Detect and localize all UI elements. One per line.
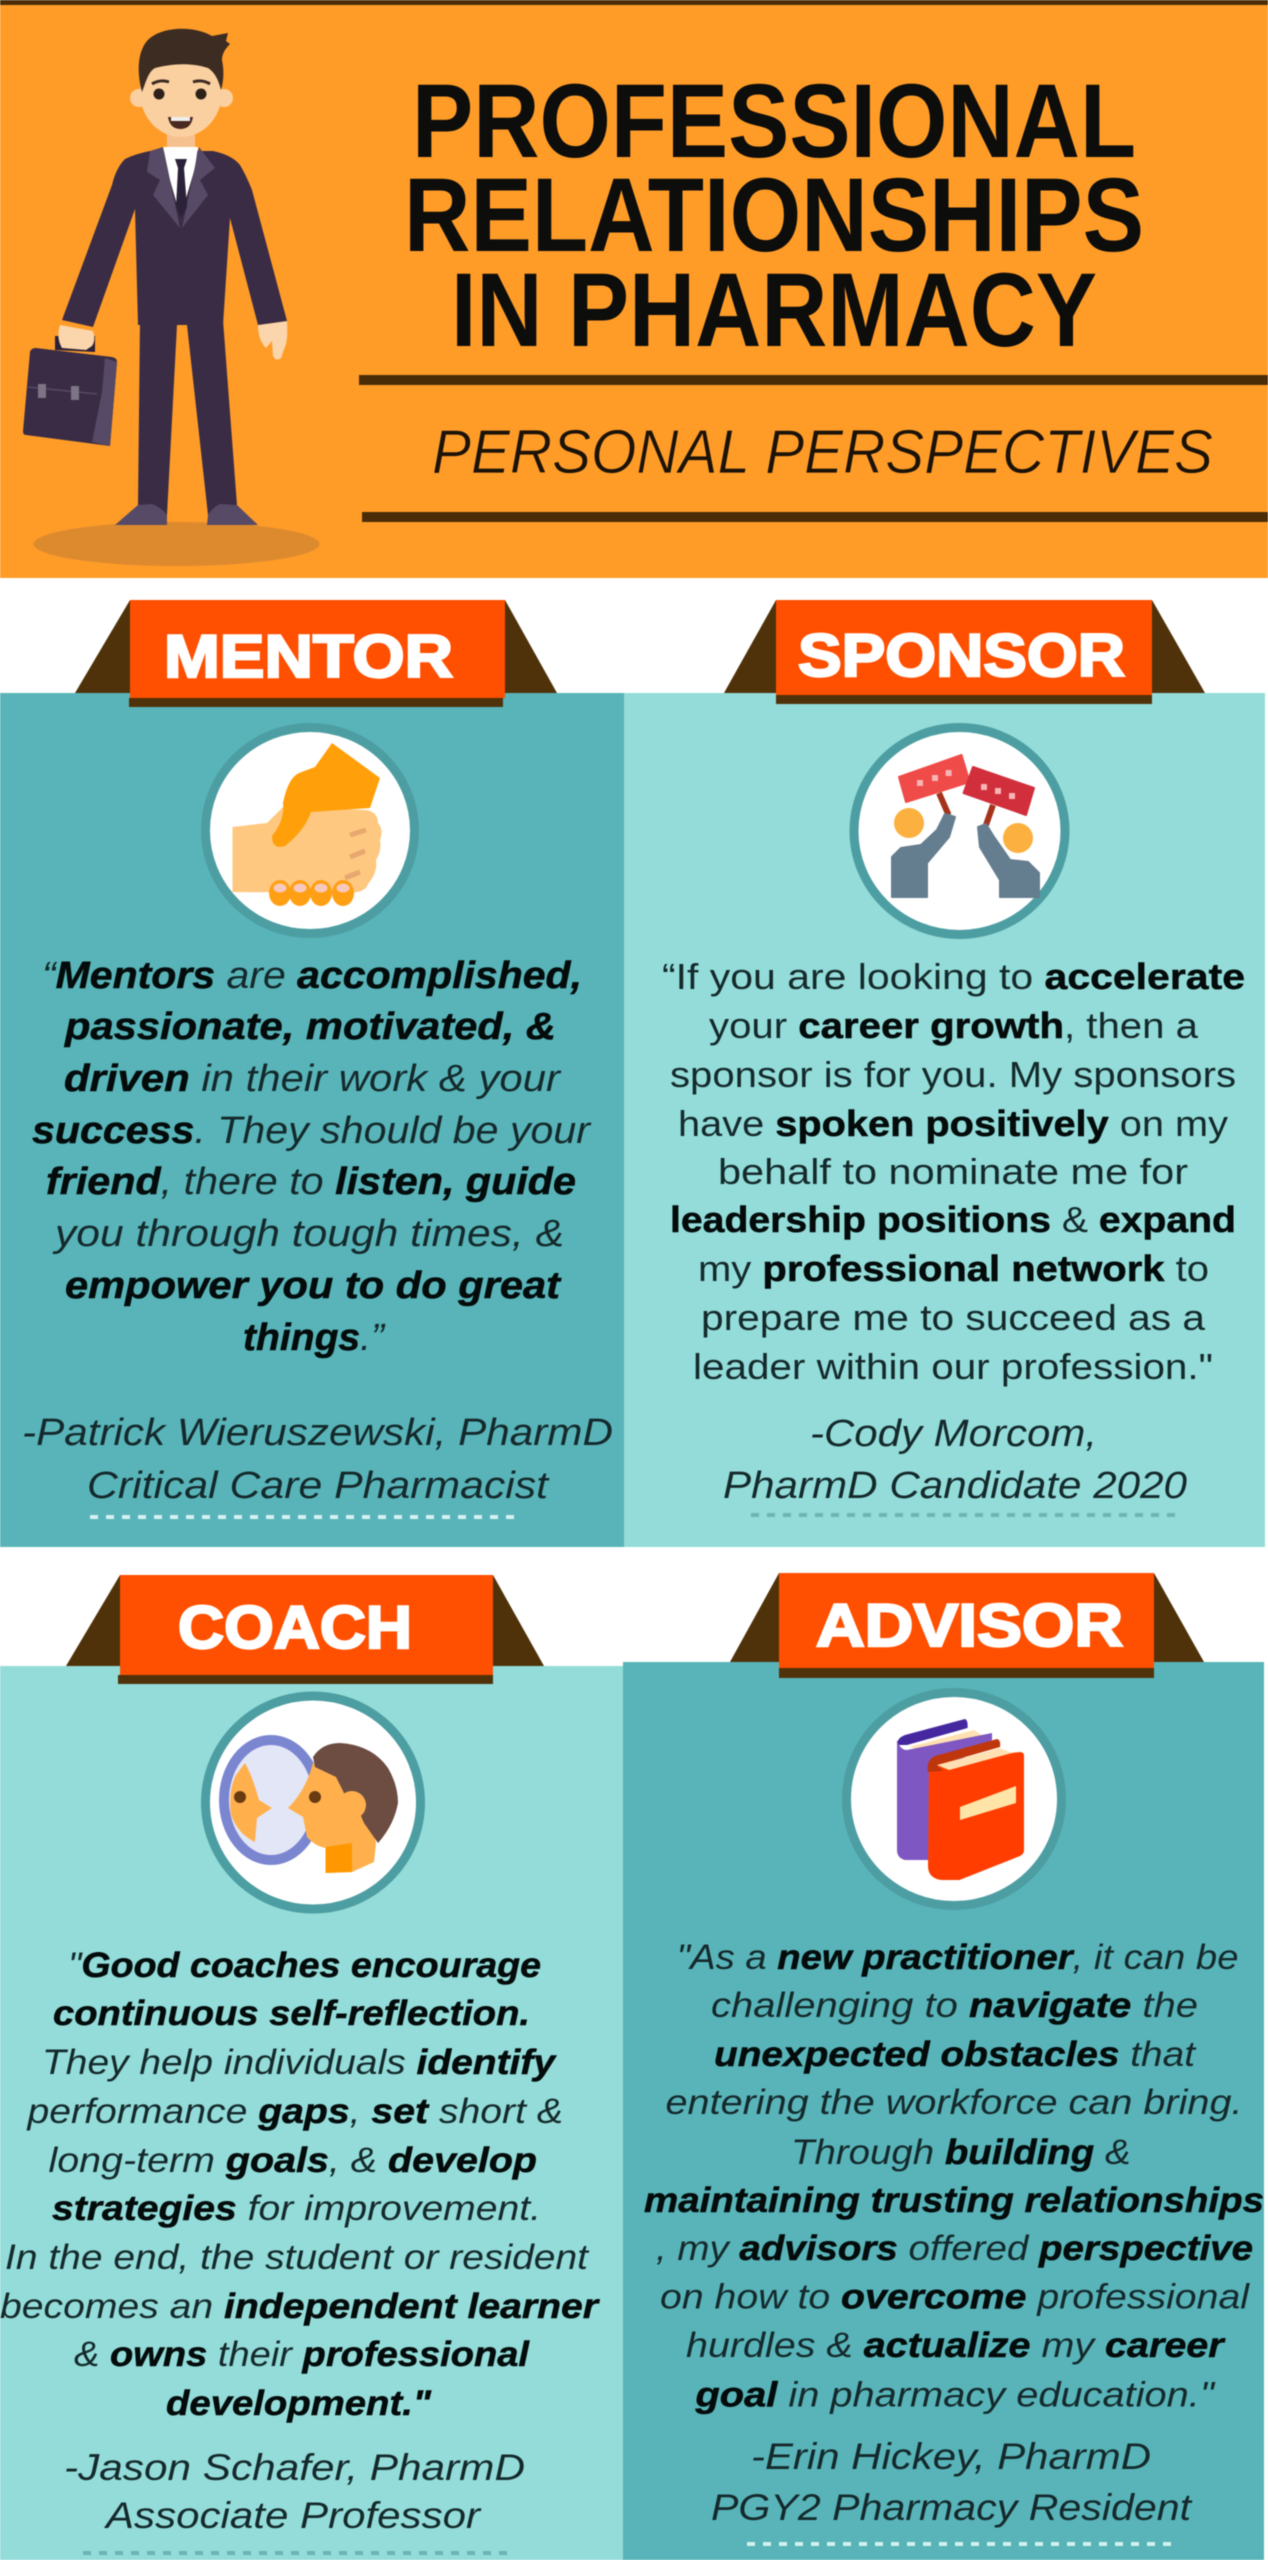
banner: mentor: MENTOR <box>164 623 453 690</box>
quote: coach: strategies for improvement. <box>52 2189 541 2228</box>
banner: advisor: ADVISOR <box>816 1592 1123 1659</box>
banner: coach <box>66 1575 544 1684</box>
quote: advisor: hurdles & actualize my career <box>686 2326 1226 2365</box>
quote: mentor: you through tough times, & <box>52 1213 564 1255</box>
illustration: businessman with briefcase <box>23 29 320 566</box>
attribution: mentor <box>22 1412 613 1507</box>
quote: advisor: on how to overcome professional <box>660 2278 1250 2317</box>
attribution: mentor: Critical Care Pharmacist <box>87 1465 550 1507</box>
quote: advisor: , my advisors offered perspective <box>656 2229 1253 2268</box>
title: IN PHARMACY <box>451 252 1097 369</box>
banner: sponsor: SPONSOR <box>798 622 1125 689</box>
quote: mentor <box>32 955 591 1359</box>
quote: sponsor: sponsor is for you. My sponsors <box>670 1054 1236 1095</box>
header panel <box>0 0 1268 578</box>
icon: face in mirror <box>206 1696 420 1909</box>
quote: advisor <box>644 1938 1264 2414</box>
quote: advisor: challenging to navigate the <box>711 1986 1198 2025</box>
quote: coach: continuous self-reflection. <box>53 1994 530 2033</box>
neck and head <box>167 130 195 150</box>
panel: mentor <box>0 600 624 1547</box>
divider top <box>359 375 1268 385</box>
quote: coach: long-term goals , & develop <box>48 2141 537 2180</box>
quote: mentor: “Mentors are accomplished, <box>42 955 582 997</box>
quote: advisor: Through building & <box>791 2133 1131 2172</box>
quote: advisor: entering the workforce can bring. <box>666 2083 1242 2122</box>
banner: coach: COACH <box>178 1594 412 1661</box>
quote: coach: & owns their professional <box>74 2335 530 2374</box>
quote: advisor: maintaining trusting relationships <box>644 2181 1264 2220</box>
quote: coach: In the end, the student or resident <box>5 2238 589 2277</box>
attribution: coach: -Jason Schafer, PharmD <box>64 2447 525 2488</box>
quote: sponsor: my professional network to <box>698 1248 1209 1289</box>
subtitle: PERSONAL PERSPECTIVES <box>432 418 1213 487</box>
quote: advisor: unexpected obstacles that <box>714 2035 1196 2074</box>
title: PROFESSIONAL <box>412 63 1136 180</box>
legs <box>138 320 237 515</box>
panel: sponsor <box>624 600 1265 1547</box>
attribution: advisor: -Erin Hickey, PharmD <box>751 2436 1151 2477</box>
quote: sponsor: behalf to nominate me for <box>718 1151 1188 1192</box>
quote: sponsor: your career growth , then a <box>709 1005 1199 1046</box>
quote: sponsor: “If you are looking to accelerate <box>662 956 1245 997</box>
attribution: advisor: PGY2 Pharmacy Resident <box>711 2487 1193 2528</box>
title <box>404 63 1144 369</box>
lapels <box>147 147 180 228</box>
attribution: mentor: -Patrick Wieruszewski, PharmD <box>22 1412 613 1454</box>
attribution: sponsor: -Cody Morcom, <box>810 1413 1097 1455</box>
quote: sponsor: prepare me to succeed as a <box>701 1297 1206 1338</box>
icon: handshake <box>206 728 414 934</box>
divider bottom <box>362 512 1268 522</box>
quote: coach: development." <box>166 2384 431 2423</box>
jacket <box>62 151 287 327</box>
quote: mentor: friend, there to listen, guide <box>46 1161 576 1203</box>
quote: advisor: goal in pharmacy education." <box>694 2376 1216 2414</box>
icon: raised signs <box>854 728 1065 934</box>
attribution: coach: Associate Professor <box>104 2495 482 2536</box>
icon: books <box>846 1692 1062 1906</box>
briefcase <box>23 336 117 446</box>
quote: mentor: things.” <box>243 1317 386 1359</box>
left hand <box>58 325 94 350</box>
right hand <box>258 321 287 360</box>
banner: advisor <box>730 1573 1204 1678</box>
quote: coach: They help individuals identify <box>42 2043 557 2082</box>
attribution: sponsor <box>723 1413 1187 1507</box>
panel: advisor <box>623 1573 1264 2560</box>
quote: sponsor: leadership positions & expand <box>670 1199 1236 1240</box>
banner: sponsor <box>724 600 1205 704</box>
quote: sponsor: have spoken positively on my <box>678 1103 1228 1144</box>
panel: coach <box>0 1575 623 2560</box>
necktie <box>175 159 187 218</box>
banner: mentor <box>75 600 557 707</box>
title: RELATIONSHIPS <box>404 157 1144 274</box>
quote: coach <box>0 1946 601 2423</box>
quote: sponsor <box>662 956 1245 1387</box>
quote: sponsor: leader within our profession." <box>693 1346 1213 1387</box>
attribution: sponsor: PharmD Candidate 2020 <box>723 1465 1187 1507</box>
quote: mentor: passionate, motivated, & <box>64 1006 556 1048</box>
quote: advisor: "As a new practitioner , it can be <box>676 1938 1238 1977</box>
quote: mentor: empower you to do great <box>65 1265 561 1307</box>
quote: coach: becomes an independent learner <box>0 2287 601 2326</box>
quote: mentor: success . They should be your <box>32 1110 591 1152</box>
shirt collar <box>163 147 198 215</box>
quote: coach: performance gaps , set short & <box>26 2092 563 2131</box>
quote: mentor: driven in their work & your <box>64 1058 561 1100</box>
attribution: advisor <box>711 2436 1193 2528</box>
quote: coach: "Good coaches encourage <box>68 1946 541 1985</box>
attribution: coach <box>64 2447 525 2536</box>
